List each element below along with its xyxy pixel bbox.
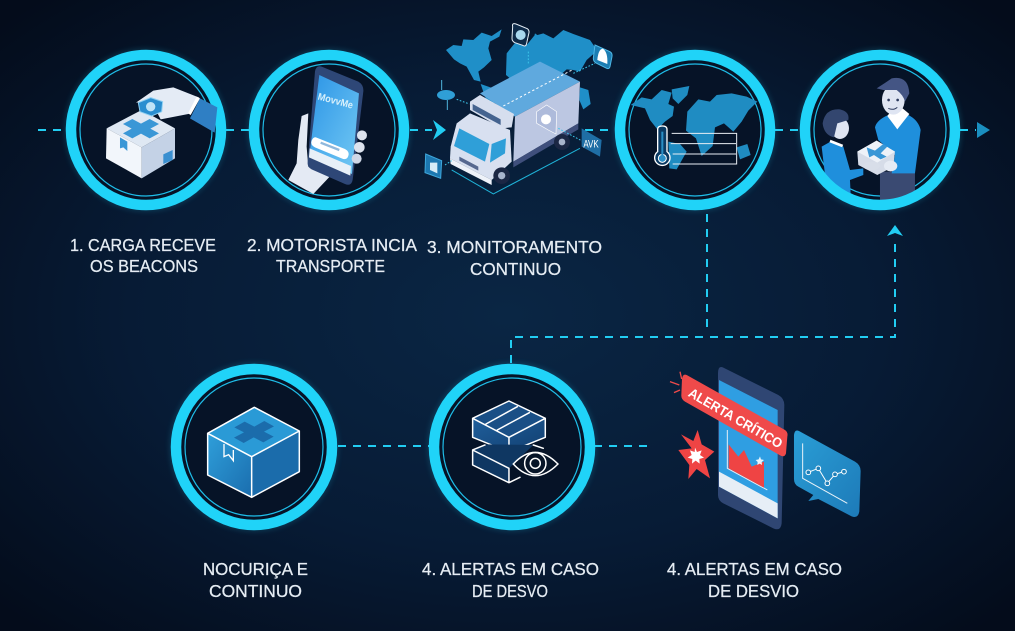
icon: thermometer <box>655 126 670 165</box>
tag: top sensor <box>512 24 529 46</box>
alert banner: ALERTA CRÍTICO <box>686 385 785 451</box>
step 1 label: 1. CARGA RECEVE <box>70 235 216 255</box>
tag: lower right sensor: AVK <box>583 138 599 150</box>
icon: box with beacon and hand <box>106 87 217 178</box>
map: world behind truck <box>446 29 597 109</box>
icon: blue outlined box <box>208 407 299 497</box>
label: alertas em caso de desvo <box>422 559 599 601</box>
icon: hand holding phone <box>288 66 367 194</box>
tag: lower right sensor <box>582 128 602 157</box>
step 3 label: CONTINUO <box>470 259 561 279</box>
icon: alert rays <box>670 372 682 393</box>
phone app name: MovvMe <box>317 92 355 112</box>
icon: stacked boxes and eye <box>473 401 558 483</box>
icon: bell tag on truck <box>537 105 557 134</box>
step 5: delivery to customer <box>799 49 961 211</box>
step 1: cargo receives beacons <box>65 49 227 211</box>
connector: bottom flow line <box>338 445 650 447</box>
phone <box>718 367 784 529</box>
platform outline <box>452 148 580 194</box>
step 3: truck with world map and sensors <box>425 24 612 194</box>
temperature chart lines <box>671 133 737 164</box>
chart bubble <box>794 430 861 517</box>
label: nocuriça e continuo <box>203 559 308 601</box>
step 3 label: 3. MONITORAMENTO <box>427 237 602 257</box>
step 2 label: TRANSPORTE <box>276 256 385 276</box>
connector: return path with arrow <box>511 214 903 363</box>
label: alertas em caso de desvio <box>667 559 842 601</box>
tag: lower left sensor <box>425 154 442 178</box>
step: critical alert phone <box>670 367 861 529</box>
sensor lines <box>445 52 595 165</box>
step 1 label <box>70 235 216 276</box>
label: nocuriça e continuo: CONTINUO <box>209 581 302 601</box>
map: world with temperature gauge <box>631 86 757 169</box>
step: medical box circle <box>170 363 338 531</box>
step 2: driver starts transport <box>248 49 410 211</box>
step 2 label <box>247 235 417 276</box>
step: boxes with eye circle <box>428 363 596 531</box>
label: nocuriça e continuo: NOCURIÇA E <box>203 559 308 579</box>
label: alertas em caso de desvio: DE DESVIO <box>708 581 799 601</box>
truck body <box>480 62 580 117</box>
step 3 label <box>427 237 602 279</box>
step 2 label: 2. MOTORISTA INCIA <box>247 235 417 255</box>
label: alertas em caso de desvo: DE DESVO <box>472 581 548 601</box>
label: alertas em caso de desvio: 4. ALERTAS EM CASO <box>667 559 842 579</box>
connector: top flow line <box>38 120 990 140</box>
step 1 label: OS BEACONS <box>90 256 198 276</box>
figures: man and child exchanging box <box>822 78 921 201</box>
label: alertas em caso de desvo: 4. ALERTAS EM CASO <box>422 559 599 579</box>
step 4: temperature and map <box>614 49 776 211</box>
icon: red burst <box>678 430 714 479</box>
tag: left sensor chip <box>437 80 455 110</box>
tag: bell sensor <box>593 45 612 69</box>
